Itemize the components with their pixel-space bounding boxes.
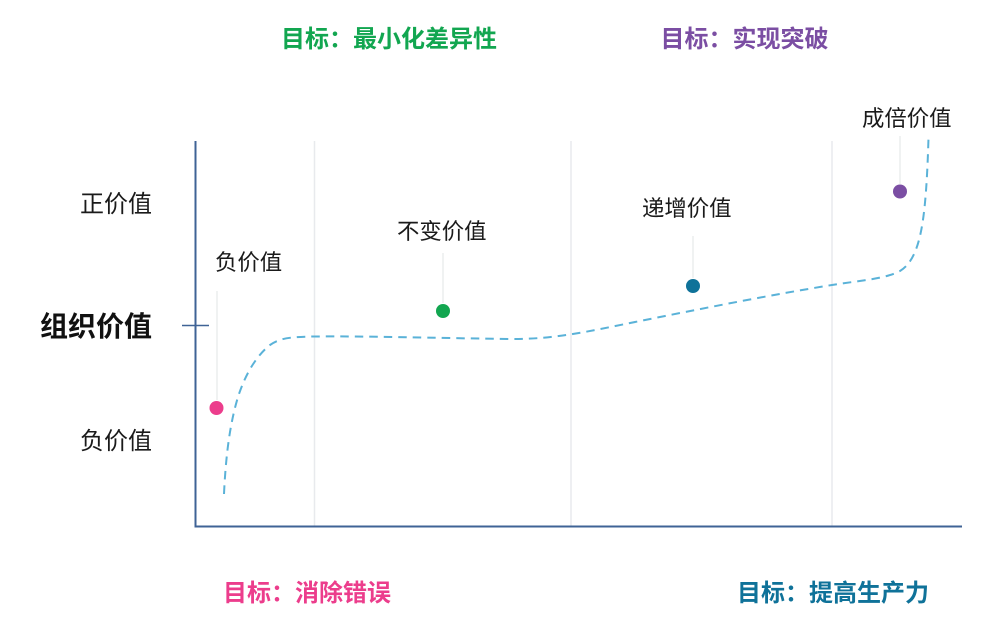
- point: incremental value: [642, 196, 732, 293]
- y-axis tick: [182, 324, 209, 326]
- point: negative value: [210, 250, 282, 415]
- point: negative value: 负价值: [215, 250, 282, 275]
- chart axes: [196, 141, 962, 526]
- heading: goal eliminate errors: 目标：消除错误: [223, 580, 391, 607]
- dashed value curve: [224, 138, 928, 494]
- y-axis label: negative value: 负价值: [80, 428, 152, 455]
- heading: goal improve productivity: 目标：提高生产力: [737, 580, 929, 607]
- point: constant value: [397, 219, 487, 318]
- point: constant value: 不变价值: [397, 219, 487, 244]
- heading: goal breakthrough: 目标：实现突破: [660, 26, 828, 53]
- point: incremental value: 递增价值: [642, 196, 732, 221]
- y-axis label: positive value: 正价值: [80, 191, 152, 218]
- y-axis label: organizational value: 组织价值: [40, 311, 152, 342]
- point: multiplied value: [862, 106, 952, 198]
- point: multiplied value: 成倍价值: [862, 106, 952, 131]
- heading: goal minimize variance: 目标：最小化差异性: [281, 26, 497, 53]
